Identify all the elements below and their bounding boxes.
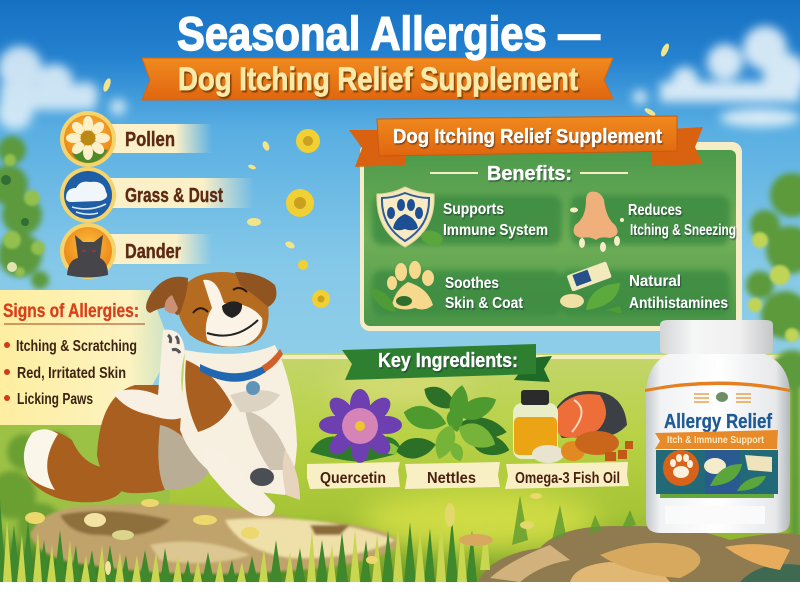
bottle label top stripe [645,382,790,392]
icon: capsule, tablet and leaf [560,261,622,314]
allergen: dander [60,223,212,279]
panel: benefits [349,116,742,331]
benefit: immune system [377,187,548,248]
allergen: pollen: Pollen [125,129,175,151]
benefit: reduces itching [570,192,736,252]
stone path [25,499,400,574]
dog right ear [235,272,276,307]
rocks: bottom right [478,526,800,582]
floating dandelions and petals [102,42,671,308]
allergen: dander: Dander [125,241,181,263]
clouds: right [633,26,800,127]
heading: signs of allergies: Signs of Allergies: [3,301,139,322]
symptom list [4,338,137,408]
allergen: pollen [60,111,212,167]
label: omega-3 fish oil: Omega-3 Fish Oil [515,470,620,487]
dog raised leg [113,330,188,419]
ribbon: key ingredients: Key Ingredients: [378,350,518,372]
ribbon: product name: Dog Itching Relief Supplement [393,126,662,148]
benefit: natural antihistamines: Antihistamines [629,295,728,312]
ribbon: product name [349,116,703,167]
benefit: soothes skin: Soothes [445,275,499,292]
heading: benefits: Benefits: [487,163,572,185]
shrub left of dog [0,432,68,547]
clouds: left [0,46,126,130]
benefit: soothes skin [370,261,524,312]
icon: purple flower [310,389,402,463]
dog tail [24,429,125,502]
benefit: immune system: Supports [443,201,504,218]
bottle product name: Allergy Relief [664,411,772,433]
dog nose and smile [222,301,242,318]
tree: right [746,173,800,540]
benefit: reduces itching: Itching & Sneezing [630,222,736,239]
icon: nettle leaves [395,381,512,463]
bottle logo [694,392,751,402]
benefit: reduces itching: Reduces [628,202,682,219]
dog haunch [97,385,190,493]
allergen: grass and dust: Grass & Dust [125,185,223,207]
symptom list: Licking Paws [17,391,93,408]
dog [24,272,300,516]
icon: oil bottle, salmon and turmeric [513,390,633,463]
dog left ear [146,277,188,315]
label: nettles: Nettles [427,470,476,487]
panel: signs of allergies [0,290,172,425]
bottle cap [660,320,773,354]
title: Seasonal Allergies — [177,7,600,60]
benefit: natural antihistamines [560,261,728,314]
benefit: immune system: Immune System [443,222,548,239]
benefit: soothes skin: Skin & Coat [445,295,524,312]
allergen: grass and dust [60,167,254,223]
ingredient: quercetin [307,389,402,489]
ribbon: key ingredients [342,344,552,382]
benefit: natural antihistamines: Natural [629,273,681,290]
foreground grass [0,493,636,582]
title banner: Dog Itching Relief Supplement [178,61,578,97]
bottle orange band: Itch & Immune Support [667,434,764,446]
icon: nose [570,192,624,252]
label: quercetin: Quercetin [320,470,386,487]
ingredient: omega-3 fish oil [505,390,633,489]
bottle orange band [655,430,778,449]
icon: shield [377,187,444,248]
dog body [180,345,297,495]
symptom list: Itching & Scratching [16,338,137,355]
icon: paw with leaves [370,261,434,312]
bottom white strip [0,582,800,600]
dog front legs [204,445,275,516]
dog head [146,272,276,347]
bottle body [646,354,790,533]
dog collar [200,349,283,395]
bottle label picture [656,450,778,498]
symptom list: Red, Irritated Skin [17,365,126,382]
tree: left [0,136,49,289]
supplement bottle [645,320,790,533]
ingredient: nettles [395,381,512,489]
bottle base highlight [665,506,765,524]
